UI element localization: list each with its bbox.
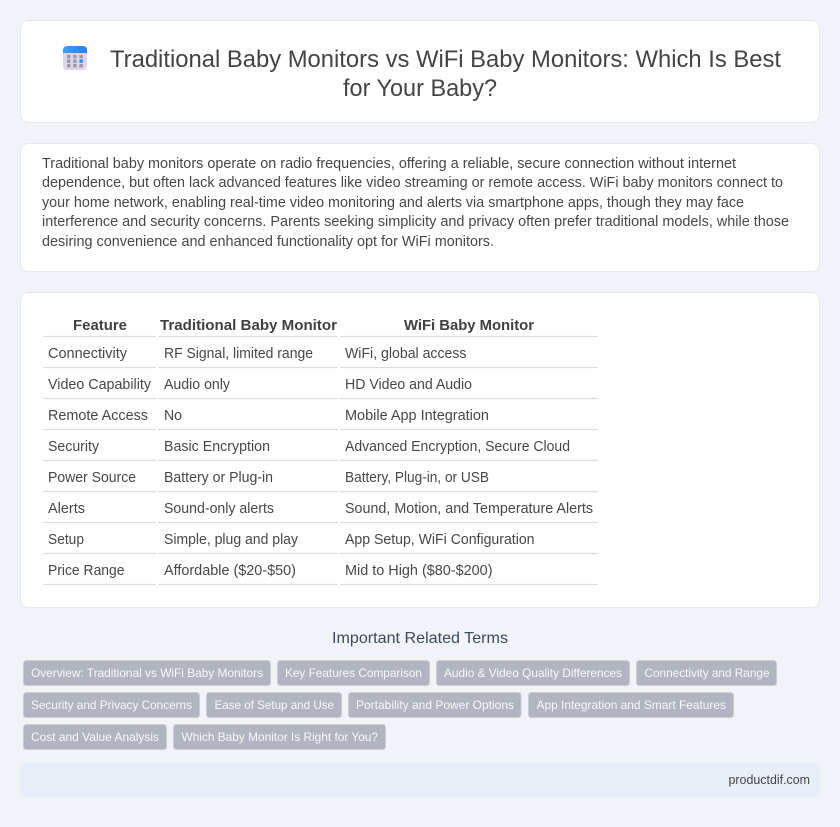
- panel: comparison table: [20, 292, 820, 608]
- intro paragraph: Traditional baby monitors operate on radio frequencies, offering a reliable, secure connection without internet: [42, 156, 736, 172]
- tag: portability: [348, 692, 521, 718]
- title: [110, 46, 781, 102]
- table header row: Traditional Baby Monitor: [160, 318, 337, 334]
- panel: title header: [20, 20, 820, 122]
- related term tags: [24, 660, 776, 750]
- row: alerts: Sound-only alerts: [164, 501, 274, 517]
- tag: which monitor: Which Baby Monitor Is Right for You?: [182, 730, 378, 744]
- tag: ease of setup: Ease of Setup and Use: [214, 698, 334, 712]
- row: price range: Affordable ($20-$50): [164, 563, 296, 579]
- intro paragraph: [42, 156, 789, 250]
- tag: overview: [24, 660, 270, 686]
- intro paragraph: interference and security concerns. Parents seeking simplicity and privacy often prefer traditional models, while those: [42, 214, 789, 230]
- title: Traditional Baby Monitors vs WiFi Baby Monitors: Which Is Best: [110, 46, 781, 73]
- row: video capability: HD Video and Audio: [345, 377, 472, 393]
- tag: portability: Portability and Power Options: [356, 698, 514, 712]
- row: alerts: Sound, Motion, and Temperature Alerts: [345, 501, 593, 517]
- row: video capability: [43, 377, 598, 398]
- row: power source: Battery, Plug-in, or USB: [345, 470, 489, 486]
- tag: app integration: App Integration and Smart Features: [536, 698, 726, 712]
- tag: app integration: [528, 692, 734, 718]
- table header row: WiFi Baby Monitor: [404, 318, 534, 334]
- tag: audio and video: [436, 660, 630, 686]
- row: security: [43, 439, 598, 460]
- row: setup: Simple, plug and play: [164, 532, 299, 548]
- heading: important related terms: Important Related Terms: [332, 630, 508, 647]
- icon: calendar grid: [63, 46, 87, 70]
- row: remote access: No: [164, 408, 182, 424]
- tag: overview: Overview: Traditional vs WiFi Baby Monitors: [31, 666, 263, 680]
- row: setup: [43, 532, 598, 554]
- table header row: Feature: [73, 318, 127, 334]
- tag: key features: [278, 660, 430, 686]
- intro paragraph: desiring convenience and enhanced functionality opt for WiFi monitors.: [42, 234, 494, 250]
- panel: introduction text: [20, 144, 820, 272]
- tag: cost and value: Cost and Value Analysis: [31, 730, 159, 744]
- row: alerts: [43, 501, 598, 522]
- intro paragraph: your home network, enabling real-time video monitoring and alerts via smartphone apps, though they may face: [42, 195, 744, 211]
- table header row: [43, 318, 598, 336]
- tag: which monitor: [174, 724, 386, 750]
- row: security: Security: [48, 439, 100, 455]
- tag: security: Security and Privacy Concerns: [31, 698, 192, 712]
- row: connectivity: WiFi, global access: [345, 346, 466, 362]
- tag: cost and value: [24, 724, 166, 750]
- footer site name: productdif.com: [728, 773, 810, 787]
- row: security: Basic Encryption: [164, 439, 270, 455]
- row: price range: [43, 563, 598, 584]
- row: connectivity: [43, 346, 598, 368]
- tag: connectivity: [636, 660, 776, 686]
- row: setup: Setup: [48, 532, 84, 548]
- row: power source: [43, 470, 598, 492]
- row: power source: Power Source: [48, 470, 136, 486]
- row: security: Advanced Encryption, Secure Cloud: [345, 439, 570, 455]
- tag: connectivity: Connectivity and Range: [644, 666, 770, 680]
- tag: ease of setup: [206, 692, 342, 718]
- row: video capability: Audio only: [164, 377, 231, 393]
- title: for Your Baby?: [343, 75, 497, 102]
- row: remote access: [43, 408, 598, 430]
- tag: security: [24, 692, 200, 718]
- row: connectivity: Connectivity: [48, 346, 128, 362]
- tag: audio and video: Audio & Video Quality Differences: [444, 666, 622, 680]
- row: setup: App Setup, WiFi Configuration: [345, 532, 534, 548]
- tag: key features: Key Features Comparison: [285, 666, 422, 680]
- footer: [20, 763, 820, 797]
- row: connectivity: RF Signal, limited range: [164, 346, 313, 362]
- row: price range: Mid to High ($80-$200): [345, 563, 492, 579]
- row: price range: Price Range: [48, 563, 124, 579]
- row: remote access: Remote Access: [48, 408, 148, 424]
- intro paragraph: dependence, but often lack advanced features like video streaming or remote access. WiFi baby monitors connect to: [42, 175, 783, 191]
- row: remote access: Mobile App Integration: [345, 408, 489, 424]
- row: video capability: Video Capability: [48, 377, 152, 393]
- row: alerts: Alerts: [48, 501, 85, 517]
- row: power source: Battery or Plug-in: [164, 470, 273, 486]
